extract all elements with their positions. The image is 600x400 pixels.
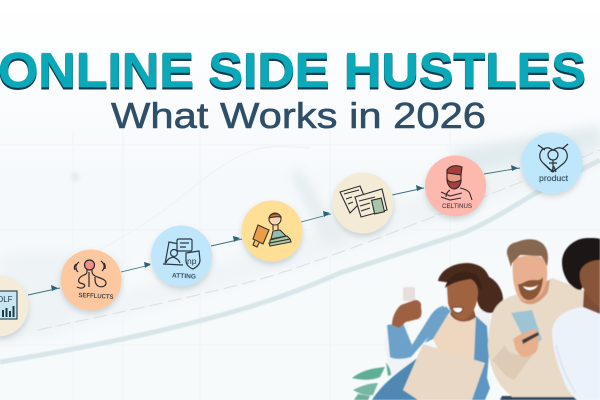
woman 1 top — [433, 312, 482, 369]
step 5: cream circle with documents — [332, 172, 394, 234]
woman 2 hair — [562, 238, 600, 290]
step 7: blue circle product — [522, 132, 582, 194]
woman 1 jacket lower left — [372, 348, 438, 400]
man phone and hand — [511, 310, 542, 357]
label: ATTING: ATTING — [172, 272, 196, 281]
plant — [352, 362, 398, 400]
arrow 6 — [484, 165, 520, 174]
title: ONLINE SIDE HUSTLES: ONLINE SIDE HUSTLES — [0, 44, 586, 98]
man jeans — [500, 396, 580, 400]
step 1: cream circle with chart icon — [0, 276, 28, 336]
icon: person with folder and stack — [253, 213, 291, 247]
woman 1 mouth — [452, 307, 463, 313]
woman 2 sweater — [552, 307, 600, 400]
arrow 1 — [28, 285, 60, 295]
man neck — [519, 280, 550, 304]
title: ONLINE SIDE HUSTLES: ONLINE SIDE HUSTLES — [0, 46, 586, 100]
arrow 2 — [121, 262, 151, 272]
icon: heart with figure — [538, 144, 568, 172]
woman 1 raised arm — [387, 306, 451, 359]
woman 1 hair — [438, 263, 503, 313]
icon: bearded man with book — [441, 166, 472, 200]
step 6: salmon circle CELTINUS — [425, 156, 486, 216]
seat backdrop — [384, 321, 413, 381]
label: CELTINUS: CELTINUS — [442, 203, 472, 210]
step 2: orange circle SEFFLUCTS — [60, 250, 122, 310]
label: product: product — [539, 174, 569, 183]
label: SEFFLUCTS: SEFFLUCTS — [78, 292, 114, 301]
icon: documents — [340, 186, 387, 217]
man hair — [507, 239, 548, 267]
woman 1 jacket right — [472, 316, 490, 400]
icon: profile documents: np — [187, 256, 197, 266]
step 3: blue circle ATTING — [151, 226, 212, 286]
icon: stressed figure — [74, 260, 106, 288]
laptop — [403, 344, 485, 400]
woman 1 hair top — [445, 272, 482, 290]
woman 1 neck and face — [450, 307, 476, 322]
subtitle: What Works in 2026: What Works in 2026 — [111, 95, 486, 136]
woman 1 hand and phone — [392, 287, 422, 328]
arrow 5 — [392, 185, 424, 195]
step 4: yellow circle with person and folder — [242, 200, 302, 262]
arrow 3 — [211, 236, 242, 246]
photo: three people using phones — [352, 238, 600, 400]
man beard — [518, 277, 543, 300]
man face — [513, 255, 547, 301]
woman 2 neck and face — [583, 290, 600, 314]
arrow 4 — [301, 211, 331, 222]
man sweater — [488, 278, 592, 397]
